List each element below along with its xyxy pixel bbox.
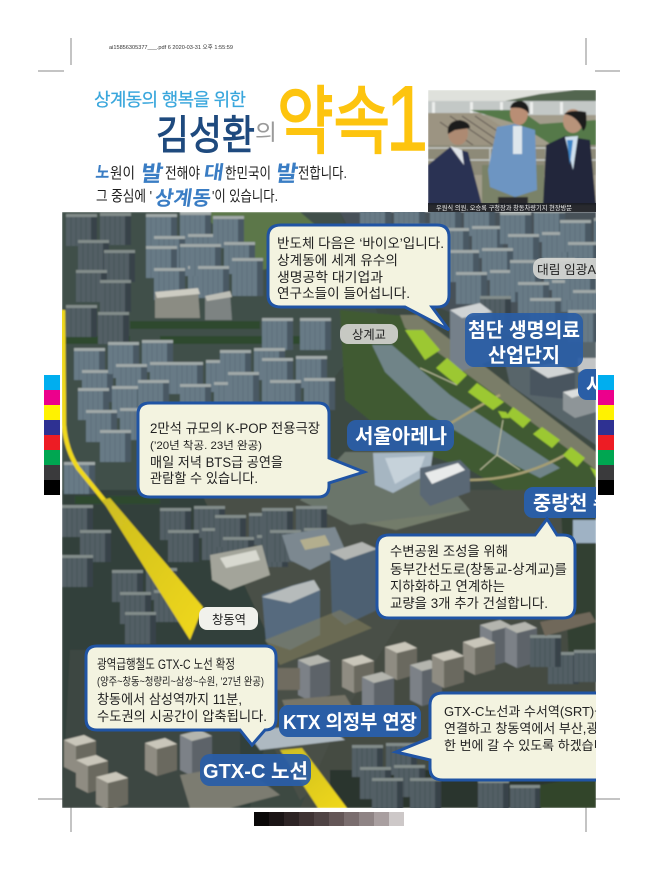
place label: station: 창동역 bbox=[212, 613, 246, 627]
arena bbox=[300, 452, 470, 525]
place label: bridge bbox=[340, 324, 398, 344]
slogan: '이 있습니다. bbox=[212, 188, 278, 205]
right street district bbox=[500, 340, 596, 445]
callout: K-POP arena: (’20년 착공. 23년 완공) bbox=[150, 439, 262, 452]
slogan: 상계동 bbox=[153, 187, 213, 210]
slogan: 원이 bbox=[110, 165, 135, 182]
GTX line: north section bbox=[63, 310, 203, 640]
callout: bio: 상계동에 세계 유수의 bbox=[277, 253, 398, 268]
callout: riverside park: 수변공원 조성을 위해 bbox=[390, 544, 508, 559]
blue label: stream: 중랑천 수 bbox=[533, 492, 611, 515]
apartments lower left bbox=[62, 505, 335, 644]
callout: GTX-C right: 연결하고 창동역에서 부산,광주까지 bbox=[444, 721, 634, 736]
place label: station bbox=[199, 607, 258, 630]
person right bbox=[543, 109, 596, 205]
lower-left dark ground bbox=[62, 490, 267, 808]
blue label: KTX: KTX 의정부 연장 bbox=[283, 711, 417, 734]
callout: GTX-C left: 창동에서 삼성역까지 11분, bbox=[97, 692, 242, 707]
slogan: 발 bbox=[139, 161, 165, 186]
photo caption bbox=[428, 203, 596, 212]
person middle bbox=[488, 101, 537, 205]
slogan: 대 bbox=[202, 162, 225, 184]
apartment blocks: middle left bbox=[64, 340, 335, 494]
callout: riverside park bbox=[377, 519, 575, 618]
blue label: bio complex bbox=[465, 313, 583, 367]
photo caption: 우원식 의원, 오승록 구청장과 창동차량기지 현장방문 bbox=[436, 203, 572, 212]
green strip upper middle bbox=[210, 212, 314, 270]
colour bar: left bbox=[44, 375, 60, 495]
blue label: bio complex: 산업단지 bbox=[488, 344, 560, 367]
callout: bio: 반도체 다음은 ‘바이오’입니다. bbox=[277, 236, 444, 251]
callout: bio: 생명공학 대기업과 bbox=[277, 270, 383, 285]
slogan: 노 bbox=[94, 163, 111, 182]
greyscale bar bbox=[254, 812, 404, 826]
callout: K-POP arena bbox=[138, 403, 364, 497]
apartment blocks: upper left bbox=[66, 212, 331, 350]
callout: riverside park: 동부간선도로(창동교-상계교)를 bbox=[390, 562, 567, 577]
callout: GTX-C left bbox=[86, 646, 276, 745]
callout: bio bbox=[268, 225, 449, 330]
person left bbox=[428, 120, 482, 205]
title block bbox=[94, 68, 428, 170]
blue label: cut-off right bbox=[578, 369, 596, 400]
callout: riverside park: 교량을 3개 추가 건설합니다. bbox=[390, 596, 548, 611]
callout: GTX-C left: 광역급행철도 GTX-C 노선 확정 bbox=[97, 657, 235, 672]
callout: GTX-C right: 한 번에 갈 수 있도록 하겠습니다. bbox=[444, 738, 621, 753]
district buildings: bio complex bbox=[450, 303, 596, 418]
centre-right buildings bbox=[245, 612, 605, 750]
GTX line: south section bbox=[280, 748, 347, 808]
slogan: 그 중심에 ' bbox=[96, 188, 152, 205]
callout: bio: 연구소들이 들어섭니다. bbox=[277, 286, 410, 301]
slogan: 발 bbox=[274, 161, 300, 186]
callout: riverside park: 지하화하고 연계하는 bbox=[390, 579, 505, 594]
callout: K-POP arena: 2만석 규모의 K-POP 전용극장 bbox=[150, 421, 320, 436]
callout: GTX-C left: (양주~창동~청량리~삼성~수원, ’27년 완공) bbox=[97, 675, 264, 688]
bio park green segments bbox=[405, 330, 596, 478]
callout: K-POP arena: 관람할 수 있습니다. bbox=[150, 471, 258, 486]
blue label: stream bbox=[524, 487, 596, 518]
callout: GTX-C left: 수도권의 시공간이 압축됩니다. bbox=[97, 709, 267, 724]
slogan: 전합니다. bbox=[298, 165, 347, 182]
buildings lower edge bbox=[63, 732, 596, 808]
blue label: GTX-C: GTX-C 노선 bbox=[203, 760, 308, 783]
river park bbox=[340, 310, 596, 510]
slogan: 전해야 bbox=[165, 165, 200, 182]
blue label: KTX bbox=[279, 705, 421, 737]
aerial scene background bbox=[62, 212, 596, 808]
upper-left residential ground bbox=[62, 212, 380, 500]
blue label: cut-off right: 사 bbox=[586, 374, 604, 397]
apartment blocks: upper right bbox=[360, 212, 596, 343]
centre district ground bbox=[200, 490, 596, 800]
promise number: 1 bbox=[386, 68, 428, 170]
callout: K-POP arena: 매일 저녁 BTS급 공연을 bbox=[150, 455, 283, 470]
label group: map place names bbox=[199, 258, 624, 786]
blue label: arena bbox=[347, 420, 454, 451]
blue label: arena: 서울아레나 bbox=[355, 425, 447, 448]
slogan: 한민국이 bbox=[225, 165, 271, 182]
slogan bbox=[94, 161, 347, 210]
callout: GTX-C right: GTX-C노선과 수서역(SRT)를 bbox=[444, 704, 606, 719]
place label: apartment: 대림 임광A bbox=[537, 263, 597, 277]
centre lab and office buildings bbox=[210, 527, 377, 665]
place label: apartment bbox=[533, 258, 596, 279]
print file stamp: ai15856305377___.pdf 6 2020-03-31 오후 1:55:59 bbox=[109, 44, 233, 51]
blue label: bio complex: 첨단 생명의료 bbox=[468, 319, 580, 342]
promise word: 약속 bbox=[277, 81, 390, 164]
blue label: GTX-C bbox=[200, 754, 311, 786]
callout: GTX-C right bbox=[391, 692, 596, 782]
subtitle: 상계동의 행복을 위한 bbox=[94, 90, 246, 110]
particle: 의 bbox=[255, 120, 277, 145]
candidate name: 김성환 bbox=[156, 113, 255, 158]
colour bar: right bbox=[598, 375, 614, 495]
tree belts bbox=[65, 320, 300, 504]
photo: site visit bbox=[428, 90, 596, 212]
upper-right district bbox=[340, 212, 596, 313]
place label: bridge: 상계교 bbox=[352, 328, 386, 342]
lower-right ground bbox=[328, 779, 329, 780]
